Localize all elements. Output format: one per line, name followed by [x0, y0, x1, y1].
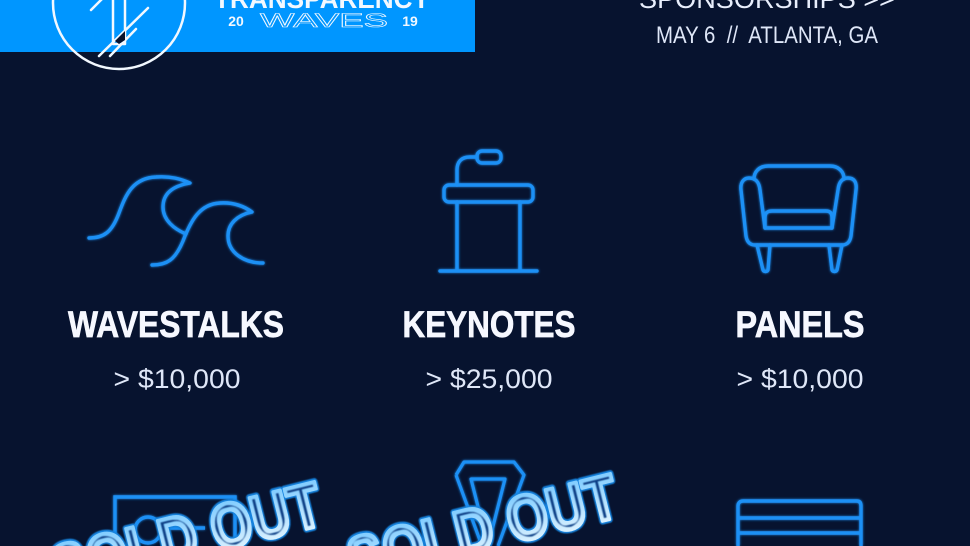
- icon: armchair: [741, 166, 856, 272]
- banner year left: 20: [228, 13, 244, 29]
- icon: waves: [89, 177, 263, 265]
- event date and place: MAY 6 // ATLANTA, GA: [656, 22, 878, 49]
- icon: medal: [456, 462, 524, 546]
- card: wavestalks label: WAVESTALKS: [68, 304, 284, 345]
- logo: circle emblem: [53, 0, 185, 69]
- icon: stacked boxes: [738, 501, 861, 546]
- card: keynotes label: KEYNOTES: [402, 304, 576, 345]
- banner year right: 19: [402, 13, 418, 29]
- banner: [0, 0, 475, 69]
- card: wavestalks price: > $10,000: [114, 364, 240, 394]
- card: panels label: PANELS: [736, 304, 864, 345]
- card: keynotes price: > $25,000: [426, 364, 552, 394]
- banner wordmark: WAVES: [260, 11, 388, 32]
- icon: ticket: [115, 497, 235, 546]
- card: panels price: > $10,000: [736, 364, 864, 394]
- icon: podium: [440, 151, 537, 271]
